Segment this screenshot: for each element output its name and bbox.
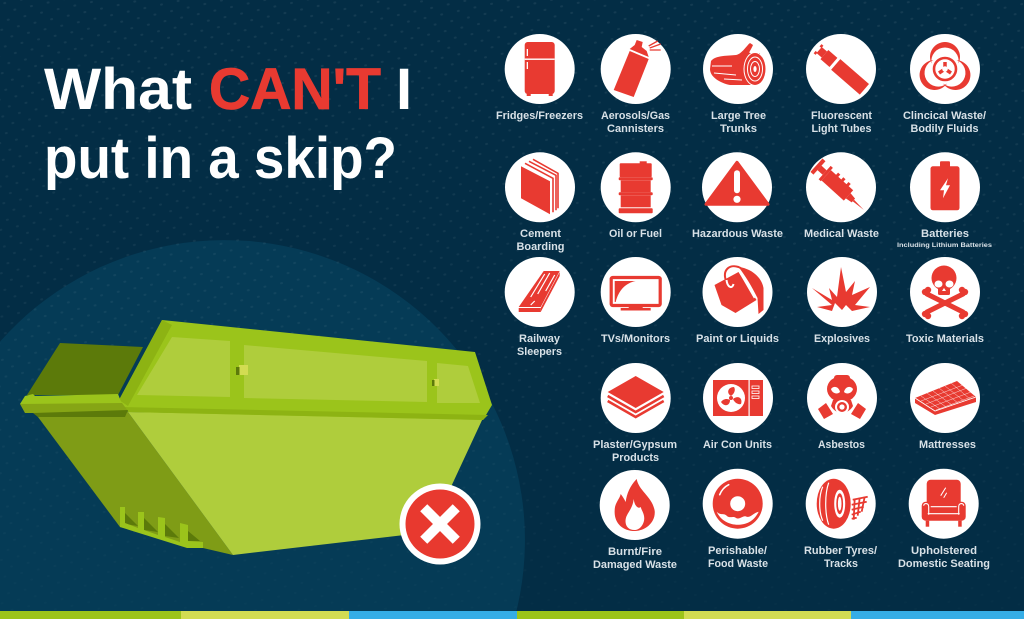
label (593, 546, 677, 571)
label (811, 110, 872, 135)
icon: fluorescent tube (806, 34, 876, 104)
item: Burnt/Fire Damaged Waste (593, 470, 677, 571)
label (898, 545, 990, 570)
title: What (44, 57, 192, 122)
title (44, 57, 412, 191)
title: CAN'T (209, 57, 381, 122)
icon: gas mask (807, 363, 877, 433)
label: Trunks (720, 123, 757, 135)
item: Fluorescent Light Tubes (806, 34, 876, 135)
icon: warning triangle (702, 152, 772, 222)
background circle (0, 240, 525, 619)
label (708, 545, 768, 570)
item: Oil or Fuel (601, 152, 671, 240)
label: TVs/Monitors (601, 333, 670, 345)
label: Light Tubes (812, 123, 872, 135)
label: Mattresses (919, 439, 976, 451)
item: Explosives (807, 257, 877, 345)
label: Bodily Fluids (910, 123, 978, 135)
label: Clincical Waste/ (903, 110, 986, 122)
label: Burnt/Fire (608, 546, 662, 558)
icon: skull and crossbones (910, 257, 980, 327)
label: Large Tree (711, 110, 766, 122)
illustration: green skip (20, 320, 492, 555)
label (517, 333, 562, 358)
label: Plaster/Gypsum (593, 439, 677, 451)
icon: air conditioning unit (703, 363, 773, 433)
icon: aerosol can (601, 34, 671, 104)
item: Railway Sleepers (505, 257, 575, 358)
item: Mattresses (910, 363, 980, 451)
icon: television (601, 257, 671, 327)
icon: paint bucket (702, 257, 772, 327)
icon: explosion (807, 257, 877, 327)
label: Toxic Materials (906, 333, 984, 345)
label: Oil or Fuel (609, 228, 662, 240)
item: Paint or Liquids (696, 257, 779, 345)
item: Batteries (897, 152, 992, 249)
label (601, 110, 670, 135)
item: TVs/Monitors (601, 257, 671, 345)
item: Cement Boarding (505, 152, 575, 253)
label: Tracks (824, 558, 858, 570)
item: Clincical Waste/Bodily Fluids (903, 34, 986, 135)
icon: biohazard (910, 34, 980, 104)
label (804, 545, 877, 570)
item: Asbestos (807, 363, 877, 451)
icon: armchair (909, 469, 979, 539)
icon: oil drum (601, 152, 671, 222)
item: Plaster/Gypsum Products (593, 363, 677, 464)
label: Air Con Units (703, 439, 772, 451)
label: Fluorescent (811, 110, 872, 122)
item: Fridges/Freezers (496, 34, 583, 122)
label: Paint or Liquids (696, 333, 779, 345)
label: Cannisters (607, 123, 664, 135)
label: Railway (519, 333, 561, 345)
latch (239, 365, 248, 375)
item: Large Tree Trunks (703, 34, 773, 135)
label: Domestic Seating (898, 558, 990, 570)
icon: log (703, 34, 773, 104)
label: Medical Waste (804, 228, 879, 240)
item: Perishable/Food Waste (703, 469, 773, 570)
icon: syringe (806, 152, 876, 222)
item: Hazardous Waste (692, 152, 783, 240)
item: Upholstered Domestic Seating (898, 469, 990, 570)
label: Batteries (921, 228, 969, 240)
label (711, 110, 766, 135)
icon: flame (600, 470, 670, 540)
label (903, 110, 986, 135)
label: Food Waste (708, 558, 768, 570)
label (516, 228, 565, 253)
item: Medical Waste (804, 152, 879, 240)
label: Asbestos (818, 439, 865, 451)
label: Rubber Tyres/ (804, 545, 877, 557)
label: Products (612, 452, 659, 464)
item: Air Con Units (703, 363, 773, 451)
title: I (396, 57, 412, 122)
icon: tyre (806, 469, 876, 539)
icon: fridge (505, 34, 575, 104)
hooks (125, 513, 138, 526)
label: Explosives (814, 333, 870, 345)
label: Including Lithium Batteries (897, 242, 992, 249)
icon: boards (505, 152, 575, 222)
label (897, 228, 992, 249)
label: Upholstered (911, 545, 977, 557)
label: Perishable/ (708, 545, 767, 557)
label: Aerosols/Gas (601, 110, 670, 122)
footer colour bar (0, 611, 1024, 619)
item: Aerosols/Gas Cannisters (601, 34, 671, 135)
label: Fridges/Freezers (496, 110, 583, 122)
item: Rubber Tyres/Tracks (804, 469, 877, 570)
badge: red cross (400, 484, 480, 564)
item: Toxic Materials (906, 257, 984, 345)
label: Boarding (516, 241, 565, 253)
label: Hazardous Waste (692, 228, 783, 240)
title: put in a skip? (44, 126, 397, 191)
label: Damaged Waste (593, 559, 677, 571)
icon: mattress (910, 363, 980, 433)
label (593, 439, 677, 464)
icon: wooden sleeper (505, 257, 575, 327)
icon: stacked sheets (601, 363, 671, 433)
icon: doughnut (703, 469, 773, 539)
label: Sleepers (517, 346, 562, 358)
label: Cement (520, 228, 561, 240)
icon: battery (910, 152, 980, 222)
